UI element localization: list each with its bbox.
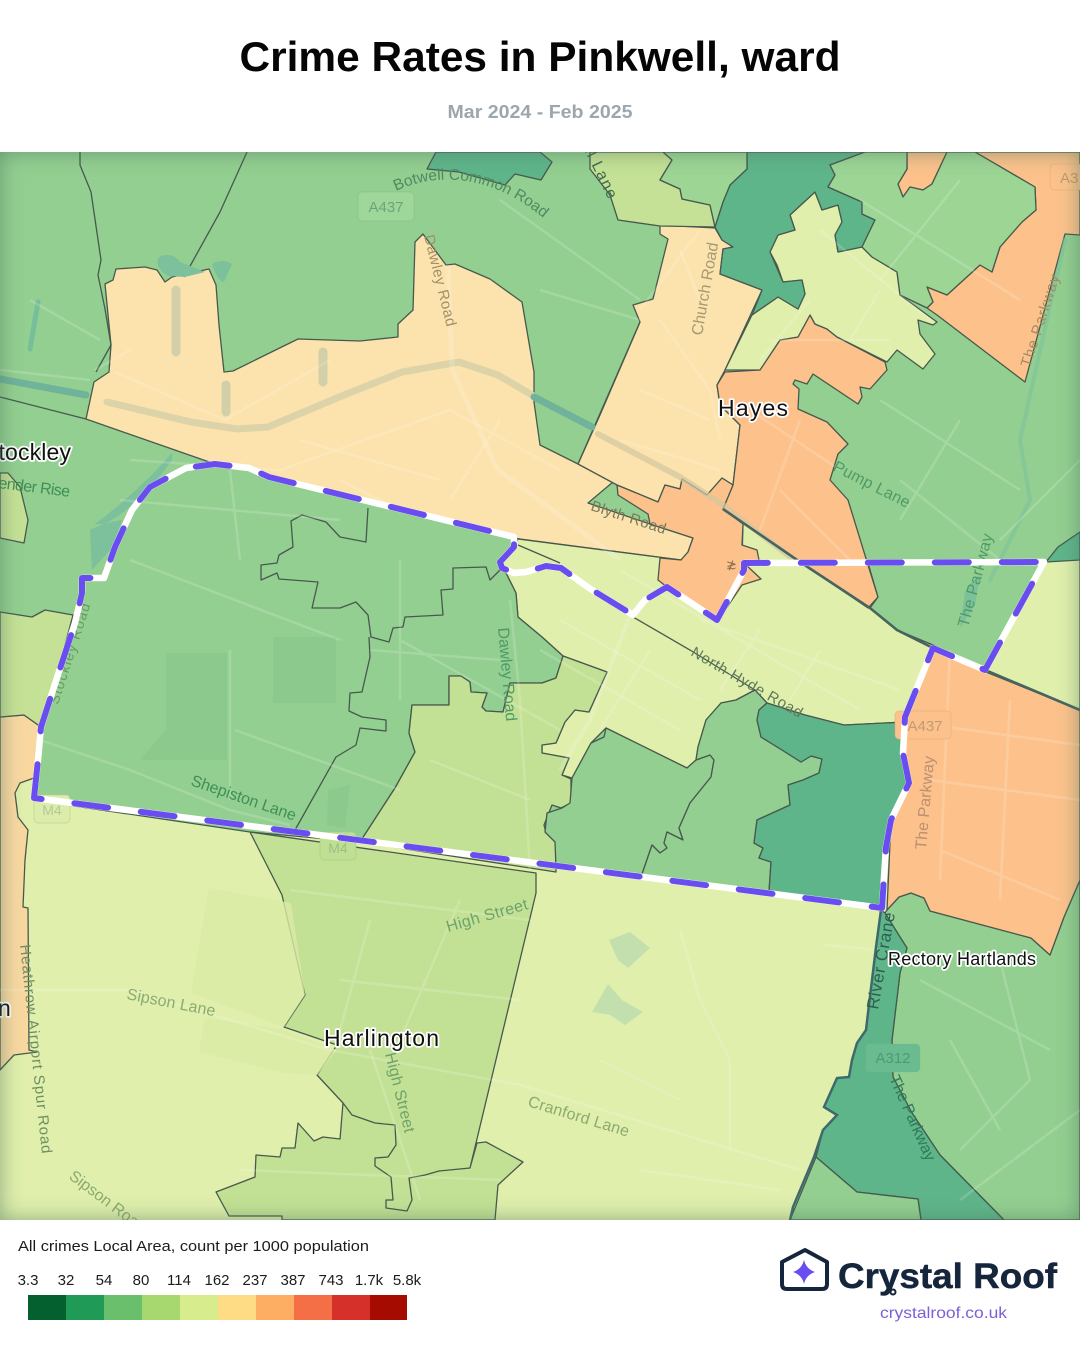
region: north-east green triangle (869, 566, 940, 648)
region: ward west green (34, 464, 563, 842)
road labels: Dawley Road (494, 627, 519, 722)
road labels: The Parkway (913, 755, 938, 850)
legend scale values: 80 (133, 1272, 149, 1289)
road shield M4 centre: M4 (328, 840, 348, 856)
place labels (0, 395, 1036, 1051)
region: west pale lower (0, 610, 73, 727)
road labels: Dawley Road (420, 233, 459, 328)
land-use patches (0, 240, 1065, 580)
road labels: River Crane (863, 911, 899, 1011)
south lime base (0, 779, 888, 1220)
River Crane line (790, 910, 881, 1220)
legend scale values: 743 (318, 1272, 344, 1289)
region: west yellow strip (0, 715, 41, 1070)
region: east pale lime (985, 557, 1080, 710)
road shield A437 east: A437 (907, 718, 943, 735)
road labels: The Parkway (1018, 272, 1064, 369)
legend scale values: 162 (204, 1272, 230, 1289)
lakes (592, 932, 650, 1025)
region: Hayes orange (717, 315, 887, 608)
legend scale values: 237 (242, 1272, 268, 1289)
road shield M4 west: M4 (42, 802, 62, 818)
region: ward pale lime (500, 509, 933, 778)
darker building blocks (140, 637, 350, 828)
north-west map boundaries (0, 152, 640, 464)
region: north-east lighter green (828, 152, 1036, 308)
road shield A437 north: A437 (368, 199, 404, 216)
ward internal boundary 1 (261, 508, 500, 642)
road shield A3 (1050, 164, 1080, 190)
road labels: The Parkway (955, 532, 997, 629)
road labels (20, 152, 1061, 1270)
region: dark green north (715, 152, 875, 315)
legend scale values: 54 (96, 1272, 112, 1289)
website url: crystalroof.co.uk (880, 1305, 1008, 1322)
road labels: Pump Lane (830, 458, 913, 512)
region: NW yellow (86, 234, 693, 560)
road labels: Church Road (689, 241, 722, 337)
region: ward lower-centre green (360, 656, 607, 872)
legend scale values: 5.8k (393, 1272, 422, 1289)
road shield A312 (866, 1044, 920, 1072)
road shield M4 west (34, 795, 70, 823)
region: north teal (427, 152, 552, 185)
road shield A437 north (358, 192, 414, 221)
road shield M4 centre (320, 832, 356, 860)
road labels: Sipson Lane (125, 986, 217, 1020)
region: Church Road yellow (578, 225, 762, 502)
road shield A3: A3 (1060, 170, 1078, 187)
road labels: The Parkway (885, 1073, 938, 1164)
ponds (90, 255, 980, 628)
region: River Crane dark green (816, 910, 1004, 1220)
road labels: Blyth Road (589, 498, 668, 538)
region: north-east orange (927, 152, 1080, 382)
region: Harlington green (216, 832, 536, 1220)
road labels: Sipson Road (66, 1168, 149, 1236)
region: station orange (617, 478, 761, 622)
ward internal boundary 2 (295, 637, 386, 830)
place labels: Harlington (324, 1025, 439, 1051)
railway line (723, 509, 1080, 710)
title: Crime Rates in Pinkwell, ward (240, 33, 840, 80)
logo: Crystal Roof (782, 1250, 1057, 1322)
region: south river green (790, 1157, 921, 1220)
road labels: North Hyde Road (688, 644, 806, 721)
region: ward east dark green (754, 703, 909, 908)
road shield A312: A312 (875, 1050, 911, 1067)
legend scale values (18, 1272, 422, 1289)
road labels: Stockley Road (46, 601, 93, 706)
region: pale inner boundary south (343, 1103, 470, 1211)
region: pale lime north of Hayes (725, 192, 937, 370)
road shield A437 east (895, 711, 951, 739)
subtitle: date range: Mar 2024 - Feb 2025 (448, 101, 632, 122)
south land-use (282, 902, 336, 1075)
icon: house with star (782, 1250, 827, 1289)
region: lighter green north (660, 152, 747, 227)
place labels: Hayes (718, 395, 788, 421)
legend scale values: 387 (280, 1272, 306, 1289)
legend title: All crimes Local Area, count per 1000 population (18, 1238, 369, 1255)
logo descender dot (890, 1290, 896, 1294)
region: north pale green (590, 152, 715, 227)
region: ward east green 1 (545, 728, 714, 877)
place labels: Rectory Hartlands (888, 949, 1036, 969)
region: small orange wedge (898, 152, 947, 197)
region: ward east green 2 (641, 690, 822, 892)
region: teal corner (1046, 532, 1080, 562)
region: west pale (0, 473, 28, 543)
faint road network (0, 180, 1080, 1200)
road labels: Cranford Lane (526, 1094, 631, 1141)
legend colour swatches (28, 1295, 407, 1320)
logo wordmark: Crystal Roof (838, 1257, 1057, 1296)
region: south-east green (885, 880, 1080, 1220)
legend scale values: 3.3 (18, 1272, 38, 1289)
ward boundary: Pinkwell (34, 464, 1044, 908)
legend scale values: 32 (58, 1272, 74, 1289)
road labels: High Street (381, 1051, 418, 1135)
road labels: Botwell Common Road (393, 168, 550, 218)
road labels: Heathrow Airport Spur Road (16, 944, 55, 1154)
pale strip boundary (518, 545, 755, 690)
legend scale values: 114 (167, 1272, 191, 1289)
legend (18, 1238, 422, 1320)
region: south-east orange (887, 645, 1080, 955)
station marker: ≵ (726, 557, 737, 572)
legend scale values: 1.7k (355, 1272, 384, 1289)
road labels: Shepiston Lane (189, 773, 298, 825)
road labels: Hill Lane (573, 129, 620, 202)
road labels: High Street (444, 896, 530, 936)
